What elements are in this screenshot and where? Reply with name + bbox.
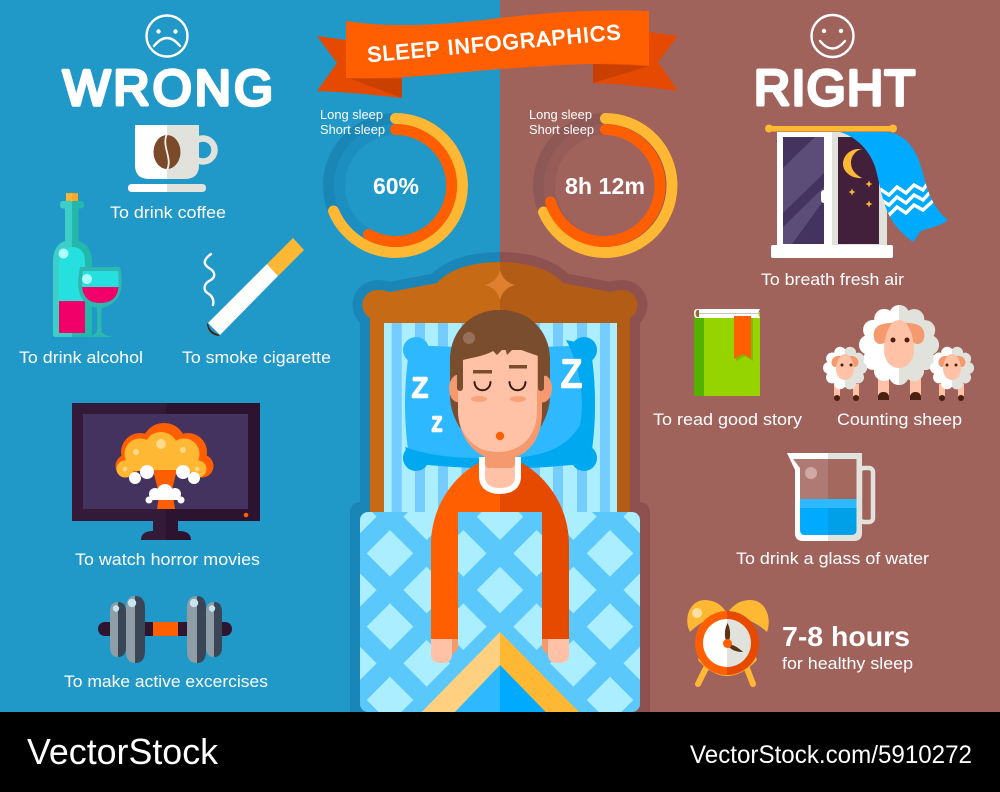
snore letters: Z	[412, 372, 428, 403]
donut chart: 8h 12m	[529, 108, 672, 252]
icon: book	[694, 309, 760, 396]
label: To breath fresh air	[761, 270, 904, 289]
item: cigarette	[182, 238, 331, 367]
head	[449, 310, 552, 460]
icon: smiley face	[812, 15, 854, 57]
ribbon right tail	[593, 32, 678, 91]
label: Counting sheep	[837, 410, 962, 429]
snore letters: Z	[561, 353, 582, 396]
value: 7-8 hours: 7-8 hours	[782, 621, 910, 652]
label: To smoke cigarette	[182, 348, 331, 367]
icon: alarm clock	[687, 600, 769, 684]
icon: right lamb	[936, 352, 968, 401]
background: right panel	[500, 0, 1000, 712]
item: alcohol	[19, 193, 143, 367]
illustration: bed with sleeping man	[360, 262, 640, 712]
footer logo: VectorStock	[27, 731, 219, 772]
snore letters: Z	[432, 414, 442, 436]
item: glass of water	[736, 453, 929, 568]
footer url: VectorStock.com/5910272	[690, 741, 972, 769]
icon: coffee cup	[128, 125, 214, 192]
left heading group	[63, 16, 273, 116]
title ribbon	[317, 10, 678, 98]
icon: curtain	[840, 132, 948, 242]
icon: television	[72, 403, 260, 540]
legend labels: Short sleep	[320, 123, 385, 137]
ribbon left tail	[317, 36, 402, 98]
item: horror movies	[72, 403, 260, 569]
icon: sad face	[146, 16, 188, 56]
icon: wine glass	[78, 267, 122, 337]
headboard ornament	[485, 270, 515, 300]
closed eyes	[474, 382, 526, 390]
shirt left	[431, 462, 500, 639]
icon: big sheep	[869, 315, 929, 400]
ribbon right fold	[593, 64, 649, 83]
shirt collar	[482, 460, 518, 491]
eyebrows	[473, 365, 527, 374]
icon: wine bottle	[53, 193, 92, 337]
hand shadows	[445, 635, 555, 655]
headboard and posts left	[362, 262, 500, 512]
legend labels: Long sleep	[529, 108, 592, 122]
item: good story	[653, 309, 803, 429]
label: To make active excercises	[64, 672, 268, 691]
label: To drink a glass of water	[736, 549, 929, 568]
icon: water jug	[787, 453, 873, 541]
fringe	[450, 310, 550, 391]
legend labels: Short sleep	[529, 123, 594, 137]
donut chart: 60%	[320, 108, 462, 252]
icon: dumbbell	[98, 596, 232, 663]
icon: mushroom cloud	[116, 423, 214, 509]
striped wall	[384, 323, 617, 513]
label: To drink coffee	[110, 203, 226, 222]
legend labels	[529, 108, 594, 137]
value: 60%: 60%	[373, 173, 419, 199]
headboard and posts right	[500, 262, 638, 512]
mouth	[496, 432, 504, 440]
icon: curtain rod	[765, 124, 897, 132]
neck shadow	[485, 450, 515, 468]
heading: wrong: WRONG	[63, 60, 273, 116]
cheeks	[471, 396, 526, 402]
hair highlight	[463, 332, 475, 344]
caption: for healthy sleep	[782, 654, 913, 673]
hands	[431, 637, 569, 663]
icon: left lamb	[829, 352, 861, 401]
callout: 7-8 hours	[687, 600, 913, 684]
shirt right	[500, 462, 569, 639]
item: counting sheep	[829, 315, 968, 429]
face	[458, 350, 537, 452]
ribbon main band	[346, 10, 649, 78]
legend labels	[320, 108, 385, 137]
item: exercises	[64, 596, 268, 691]
background: left panel	[0, 0, 500, 712]
face shadow	[458, 350, 542, 460]
heading: right: RIGHT	[754, 60, 915, 116]
value: 8h 12m: 8h 12m	[565, 173, 645, 199]
pillow	[403, 337, 597, 471]
legend labels: Long sleep	[320, 108, 383, 122]
label: To drink alcohol	[19, 348, 143, 367]
right heading group	[754, 15, 915, 116]
ribbon left fold	[346, 77, 402, 98]
blanket chevron	[422, 632, 579, 712]
back hair	[450, 310, 550, 428]
bed halo left	[350, 252, 500, 712]
ears	[449, 374, 552, 402]
bed halo right	[500, 252, 650, 712]
title text: SLEEP INFOGRAPHICS	[366, 21, 621, 67]
snore letters	[412, 353, 582, 436]
footer bar	[0, 712, 1000, 792]
icon: cigarette	[207, 238, 304, 336]
icon: smoke	[204, 254, 214, 305]
item: fresh air	[761, 124, 948, 289]
blanket	[360, 512, 640, 712]
label: To read good story	[653, 410, 803, 429]
icon: window	[771, 132, 893, 258]
item: coffee	[110, 125, 226, 222]
label: To watch horror movies	[75, 550, 260, 569]
